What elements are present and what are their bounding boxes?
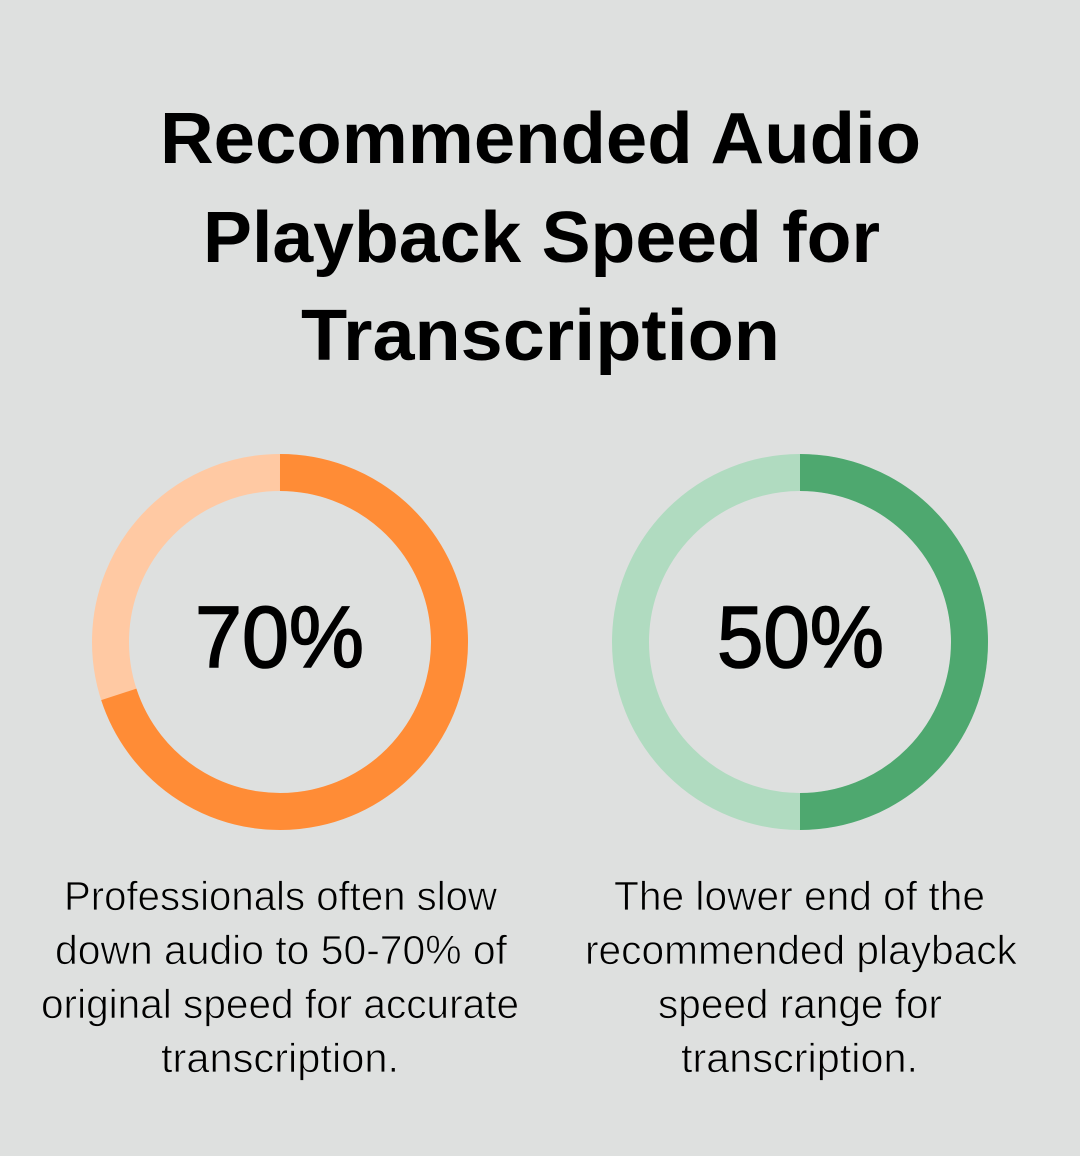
description: 70%: down audio to 50-70% of xyxy=(55,927,508,973)
donut chart: 50% xyxy=(630,472,970,812)
panel: 50% stat xyxy=(585,472,1017,1081)
title: Transcription xyxy=(301,296,780,376)
description: 50% xyxy=(585,873,1017,1081)
description: 50%: The lower end of the xyxy=(614,873,985,919)
description: 70%: transcription. xyxy=(161,1035,399,1081)
panel: 70% stat xyxy=(41,472,519,1081)
title xyxy=(160,99,921,376)
title: Playback Speed for xyxy=(203,198,880,278)
description: 50%: recommended playback xyxy=(585,927,1017,973)
value: 70%: 70% xyxy=(195,589,364,686)
donut chart: 70% xyxy=(110,472,450,812)
value: 50%: 50% xyxy=(717,589,884,686)
description: 70%: original speed for accurate xyxy=(41,981,519,1027)
title: Recommended Audio xyxy=(160,99,921,179)
description: 70%: Professionals often slow xyxy=(64,873,497,919)
description: 70% xyxy=(41,873,519,1081)
description: 50%: transcription. xyxy=(681,1035,918,1081)
description: 50%: speed range for xyxy=(658,981,942,1027)
